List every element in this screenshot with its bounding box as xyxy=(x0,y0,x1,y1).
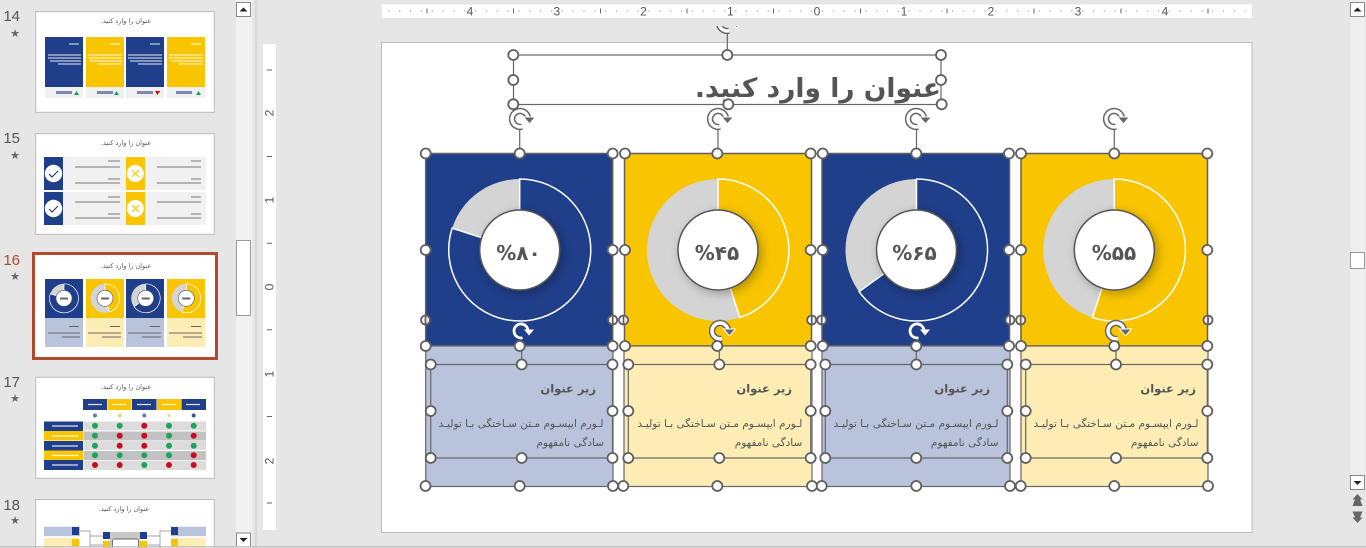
thumbnail 16 (selected): عنوان را وارد کنید. xyxy=(101,262,151,270)
thumbnail 18: عنوان را وارد کنید. xyxy=(99,505,149,513)
donut chart 80%: %۸۰ xyxy=(496,241,541,265)
thumbnail 17 xyxy=(3,374,214,478)
horizontal ruler: 4 xyxy=(467,4,474,18)
body text xyxy=(637,417,802,449)
thumbnail 17: 17 xyxy=(3,374,20,391)
vertical ruler: 2 xyxy=(262,457,276,464)
vertical ruler: 1 xyxy=(262,370,276,377)
subheading: زیر عنوان xyxy=(540,382,596,396)
donut chart 55%: %۵۵ xyxy=(1092,241,1136,265)
vertical ruler xyxy=(262,44,276,530)
thumbnail 14 xyxy=(3,8,214,112)
body text xyxy=(834,417,998,449)
thumbnail 17: ★ xyxy=(10,392,20,405)
selection handles xyxy=(420,50,1213,491)
bottom status line xyxy=(0,546,1366,548)
panel: card 4 text xyxy=(1021,346,1208,486)
donut chart 80% xyxy=(449,179,591,321)
thumbnail 16 (selected): 16 xyxy=(3,252,20,269)
panel: card 1 blue 80% xyxy=(426,154,613,346)
thumbnail 18: 18 xyxy=(3,497,20,514)
donut chart 55% xyxy=(1043,179,1185,321)
horizontal ruler: 2 xyxy=(640,4,647,18)
thumbnail 15: 15 xyxy=(3,130,20,147)
body text xyxy=(439,417,604,449)
body text: سادگی نامفهوم xyxy=(931,436,998,449)
horizontal ruler: 1 xyxy=(727,4,734,18)
thumbnail 14: ★ xyxy=(10,27,20,40)
horizontal ruler: 2 xyxy=(988,4,995,18)
horizontal ruler: 1 xyxy=(901,4,908,18)
panel: card 4 yellow 55% xyxy=(1021,154,1208,346)
donut chart 65% xyxy=(846,179,988,321)
horizontal ruler: 4 xyxy=(1162,4,1169,18)
panel: card 1 text xyxy=(426,346,613,486)
body text xyxy=(1034,417,1198,449)
panel: card 2 yellow 45% xyxy=(624,154,812,346)
thumbnail 16 (selected): ★ xyxy=(10,270,20,283)
body text: سادگی نامفهوم xyxy=(735,436,802,449)
thumbnail 18 xyxy=(3,497,214,548)
left scrollbar xyxy=(236,0,257,548)
rotation handles xyxy=(512,15,1132,364)
donut chart 65%: %۶۵ xyxy=(892,241,937,265)
panel: card 3 blue 65% xyxy=(822,154,1010,346)
panel: card 2 text xyxy=(624,346,812,486)
title box xyxy=(514,55,941,104)
vertical ruler: 1 xyxy=(262,196,276,203)
right scrollbar xyxy=(1350,0,1365,523)
thumbnail 16 (selected) xyxy=(3,252,216,358)
body text: لـورم ایپسـوم مـتن سـاختگی بـا تولیـد xyxy=(439,417,604,430)
slide canvas xyxy=(382,42,1252,532)
body text: لـورم ایپسـوم مـتن سـاختگی بـا تولیـد xyxy=(637,417,802,430)
subheading: زیر عنوان xyxy=(934,382,990,396)
body text: لـورم ایپسـوم مـتن سـاختگی بـا تولیـد xyxy=(834,417,998,430)
horizontal ruler xyxy=(382,4,1252,18)
horizontal ruler: 0 xyxy=(814,4,821,18)
vertical ruler: 2 xyxy=(262,109,276,116)
thumbnail 17: عنوان را وارد کنید. xyxy=(101,383,151,391)
panel: card 3 text xyxy=(822,346,1010,486)
donut chart 45%: %۴۵ xyxy=(695,241,739,265)
subheading: زیر عنوان xyxy=(736,382,792,396)
donut chart 45% xyxy=(647,179,789,321)
subheading: زیر عنوان xyxy=(1140,382,1196,396)
thumbnail 15: ★ xyxy=(10,149,20,162)
body text: سادگی نامفهوم xyxy=(536,436,604,449)
thumbnail 18: ★ xyxy=(10,514,20,527)
thumbnail 15: عنوان را وارد کنید. xyxy=(101,139,151,147)
body text: سادگی نامفهوم xyxy=(1131,436,1198,449)
thumbnail 14: عنوان را وارد کنید. xyxy=(101,17,151,25)
title: عنوان را وارد کنید. xyxy=(695,73,941,104)
thumbnail 15 xyxy=(3,130,214,234)
horizontal ruler: 3 xyxy=(1075,4,1082,18)
body text: لـورم ایپسـوم مـتن سـاختگی بـا تولیـد xyxy=(1034,417,1198,430)
horizontal ruler: 3 xyxy=(553,4,560,18)
thumbnail 14: 14 xyxy=(3,8,20,25)
vertical ruler: 0 xyxy=(262,283,276,290)
